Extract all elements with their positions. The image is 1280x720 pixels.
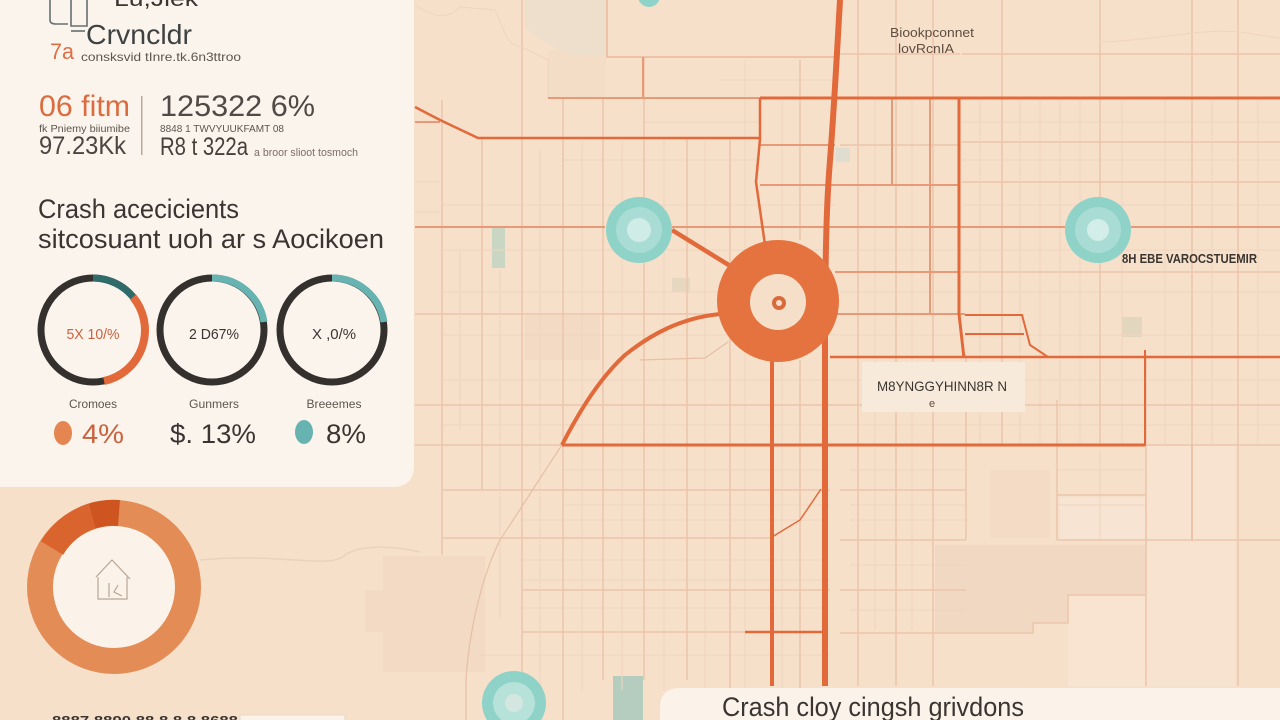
map label: north district: Biookpconnet (890, 26, 975, 40)
stat: left column: 97.23Kk (39, 132, 126, 160)
legend value 2: $. 13% (170, 419, 256, 449)
stat: right column: a broor slioot tosmoch (254, 147, 358, 159)
map label: east marker: 8H EBE VAROCSTUEMIR (1122, 251, 1258, 266)
heading: crash accidents: Crash acecicients (38, 194, 239, 224)
icon: house (96, 560, 130, 599)
stat: right column (160, 90, 358, 161)
map marker: teal east (1065, 197, 1131, 263)
map callout label (862, 362, 1025, 412)
ring chart 2: 2 D67% (189, 326, 239, 343)
minor streets (415, 60, 1280, 690)
stat: right column: R8 t 322a (160, 133, 248, 161)
ring label 2: Gunmers (189, 397, 239, 411)
stat: small orange value: 7a (50, 39, 75, 64)
left panel: statistics (0, 0, 414, 487)
ring label 3: Breeemes (306, 397, 362, 411)
legend value 3 (295, 419, 366, 449)
ring label 1: Cromoes (69, 397, 117, 411)
map marker: teal west (606, 197, 672, 263)
subheading: sitcosuant uoh ar s Aocikoen (38, 224, 384, 254)
icon: document sketch (50, 0, 87, 31)
legend value 1: 4% (82, 419, 124, 449)
map label: north district: lovRcnIA (898, 42, 955, 56)
major streets (415, 57, 1280, 314)
footer label box (240, 715, 345, 720)
stat: left column (39, 90, 130, 160)
stat: right column: 8848 1 TWVYUUKFAMT 08 (160, 123, 284, 135)
map marker: teal south (482, 671, 546, 720)
bottom caption panel (660, 688, 1280, 720)
map marker: central crash hotspot (717, 240, 839, 362)
ring chart 1 (41, 278, 145, 382)
caption under heading: consksvid tInre.tk.6n3ttroo (81, 50, 241, 64)
map label: north district (890, 26, 975, 56)
map callout label: e (929, 398, 935, 410)
legend value 1 (54, 419, 124, 449)
ring chart 2 (160, 278, 264, 382)
ring chart 3 (280, 278, 384, 382)
stat: left column: 06 fitm (39, 90, 130, 123)
legend value 3: 8% (326, 419, 366, 449)
map marker: top partial teal (638, 0, 660, 7)
ring chart 1: 5X 10/% (66, 326, 120, 343)
map callout label: M8YNGGYHINN8R N (877, 378, 1007, 394)
heading: section name: Crvncldr (86, 19, 192, 50)
donut chart (40, 513, 188, 661)
stat: left column: fk Pniemy biiumibe (39, 123, 130, 135)
ring chart 3: X ,0/% (312, 326, 356, 343)
stat: right column: 125322 6% (160, 90, 315, 123)
column divider (141, 96, 142, 155)
